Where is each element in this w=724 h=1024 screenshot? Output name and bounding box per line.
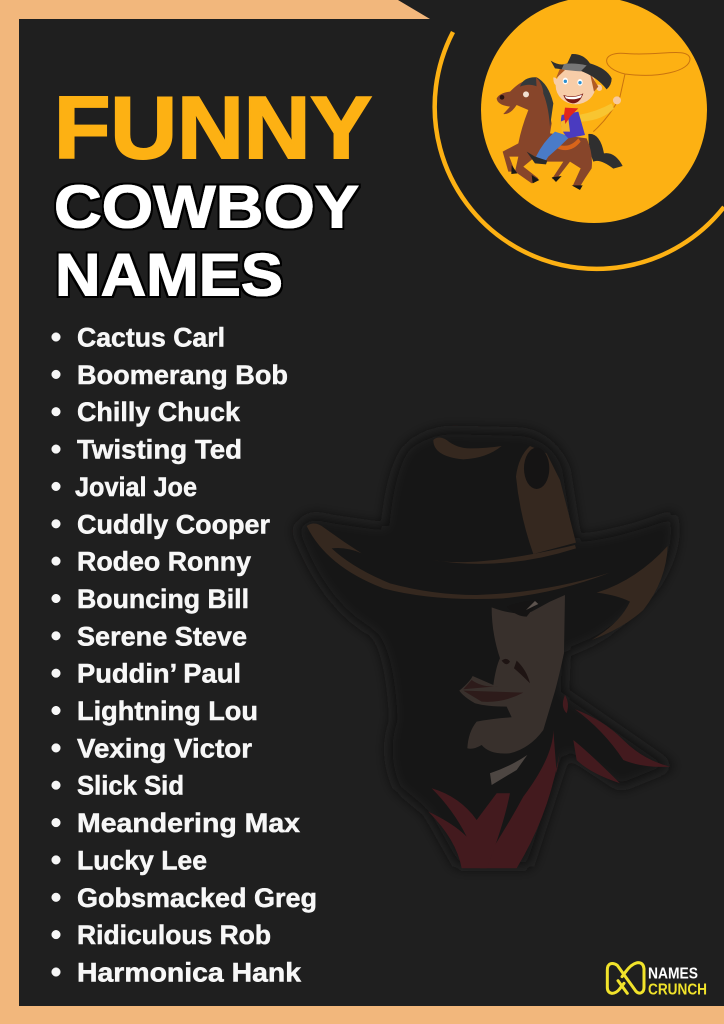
eye: [507, 600, 540, 617]
boy smile: [563, 93, 583, 103]
face: [459, 595, 565, 754]
boy eyes: [563, 78, 568, 84]
boy hand: [613, 96, 621, 104]
name: Ridiculous Rob: Ridiculous Rob: [77, 920, 271, 950]
boy yellow sleeve: [578, 103, 614, 122]
name: Puddin' Paul: Puddin’ Paul: [77, 659, 241, 689]
boy vest: [561, 112, 585, 138]
title line: COWBOY: COWBOY: [54, 174, 359, 240]
boy ears: [553, 77, 602, 91]
icon: cowboy on horse with lasso: [497, 52, 690, 190]
name: Jovial Joe: Jovial Joe: [75, 472, 197, 502]
name: Slick Sid: Slick Sid: [77, 771, 184, 801]
name: Chilly Chuck: Chilly Chuck: [77, 397, 240, 427]
bandana: [428, 695, 670, 868]
boy boot: [527, 152, 547, 164]
horse hooves: [511, 165, 583, 190]
decorative yellow arc: [435, 32, 724, 269]
boy bandana: [564, 108, 578, 124]
name: Gobsmacked Greg: Gobsmacked Greg: [77, 883, 317, 913]
title line: NAMES: NAMES: [55, 242, 283, 308]
horse mane: [520, 77, 553, 127]
eye glint: [526, 601, 538, 610]
boy face: [556, 67, 596, 104]
lips: [463, 680, 523, 702]
horse body: [497, 77, 592, 187]
nostril and cheek line: [502, 659, 530, 683]
logo wordmark: CRUNCH: CRUNCH: [648, 982, 707, 998]
saddle: [555, 138, 581, 150]
background illustration: shadowed cowboy: [295, 430, 675, 868]
name: Lightning Lou: Lightning Lou: [77, 696, 258, 726]
name: Cuddly Cooper: Cuddly Cooper: [77, 509, 270, 539]
logo wordmark: NAMES: NAMES: [648, 966, 698, 982]
list of names: [52, 322, 317, 988]
cowboy silhouette: [295, 430, 675, 867]
boy hair: [556, 68, 598, 92]
title: [54, 78, 372, 308]
horse ear: [536, 77, 543, 93]
hat crown dent: [524, 448, 549, 489]
horse tail: [588, 134, 623, 169]
hat band: [562, 64, 587, 71]
shirt collar: [490, 755, 527, 785]
name: Vexing Victor: Vexing Victor: [77, 733, 252, 763]
name: Twisting Ted: Twisting Ted: [77, 435, 242, 465]
boy shirt: [561, 118, 570, 132]
name: Serene Steve: Serene Steve: [77, 621, 247, 651]
name: Boomerang Bob: Boomerang Bob: [77, 360, 288, 390]
name: Cactus Carl: Cactus Carl: [77, 322, 225, 352]
title line: FUNNY: FUNNY: [54, 78, 372, 177]
boy hat: [551, 54, 612, 89]
name: Bouncing Bill: Bouncing Bill: [77, 584, 249, 614]
boy jeans: [536, 132, 570, 162]
hat highlights: [307, 437, 668, 640]
yellow circle: [481, 0, 707, 223]
name: Rodeo Ronny: Rodeo Ronny: [77, 547, 251, 577]
logo icon: N mark: [607, 963, 644, 993]
lasso: [593, 52, 690, 132]
name: Meandering Max: Meandering Max: [77, 808, 300, 838]
logo: Names Crunch: [607, 963, 707, 998]
name: Harmonica Hank: Harmonica Hank: [77, 958, 301, 988]
horse eye and nostril: [523, 91, 529, 97]
name: Lucky Lee: Lucky Lee: [77, 845, 207, 875]
